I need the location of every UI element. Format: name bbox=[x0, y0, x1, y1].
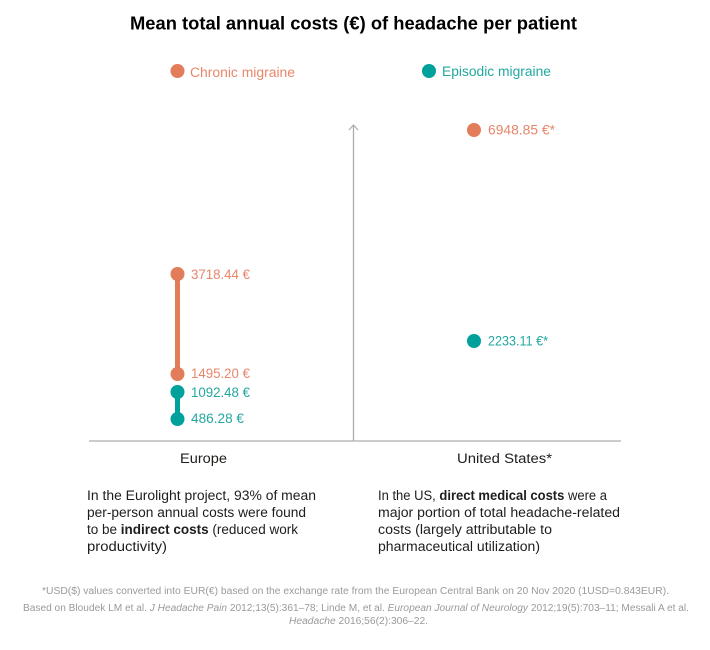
United States episodic migraine point: 2233.11 €* bbox=[488, 334, 549, 348]
text block: Europe note: productivity) bbox=[87, 539, 167, 554]
Europe chronic migraine range: 3718.44 € bbox=[191, 267, 250, 282]
footnote and references: *USD($) values converted into EUR(€) based on the exchange rate from the European Central Bank on 20 Nov 2020 (1USD=0.843EUR). bbox=[42, 586, 669, 597]
text block: United States note: pharmaceutical utilization) bbox=[378, 539, 540, 554]
Europe chronic migraine range: 1495.20 € bbox=[191, 366, 250, 381]
text block: United States note: In the US, direct medical costs were a bbox=[378, 488, 607, 503]
text block: United States note bbox=[378, 488, 620, 554]
Europe episodic migraine range: 486.28 € bbox=[191, 411, 244, 426]
text block: United States note: major portion of total headache-related bbox=[378, 505, 620, 520]
legend: chronic migraine: Chronic migraine bbox=[190, 65, 295, 80]
title: Mean total annual costs (€) of headache per patient bbox=[130, 12, 577, 34]
chart axes bbox=[89, 125, 621, 441]
legend: episodic migraine: Episodic migraine bbox=[442, 64, 551, 79]
footnote and references: Based on Bloudek LM et al. J Headache Pain 2012;13(5):361–78; Linde M, et al. European Journal of Neurology 2012;19(5):703–11; Messali A et al. bbox=[23, 603, 689, 614]
text block: United States note: costs (largely attributable to bbox=[378, 522, 552, 537]
United States chronic migraine point: 6948.85 €* bbox=[488, 122, 556, 138]
Europe episodic migraine range bbox=[170, 385, 250, 426]
Europe chronic migraine range bbox=[170, 267, 250, 381]
text block: Europe note: In the Eurolight project, 93% of mean bbox=[87, 488, 316, 503]
axis label: United States: United States* bbox=[457, 451, 553, 466]
text block: Europe note: per-person annual costs were found bbox=[87, 505, 306, 520]
Europe episodic migraine range: 1092.48 € bbox=[191, 385, 250, 400]
text block: Europe note bbox=[87, 488, 316, 554]
footnote and references bbox=[23, 586, 689, 627]
footnote and references: Headache 2016;56(2):306–22. bbox=[289, 616, 428, 627]
text block: Europe note: to be indirect costs (reduced work bbox=[87, 522, 298, 537]
axis label: Europe: Europe bbox=[180, 451, 227, 466]
